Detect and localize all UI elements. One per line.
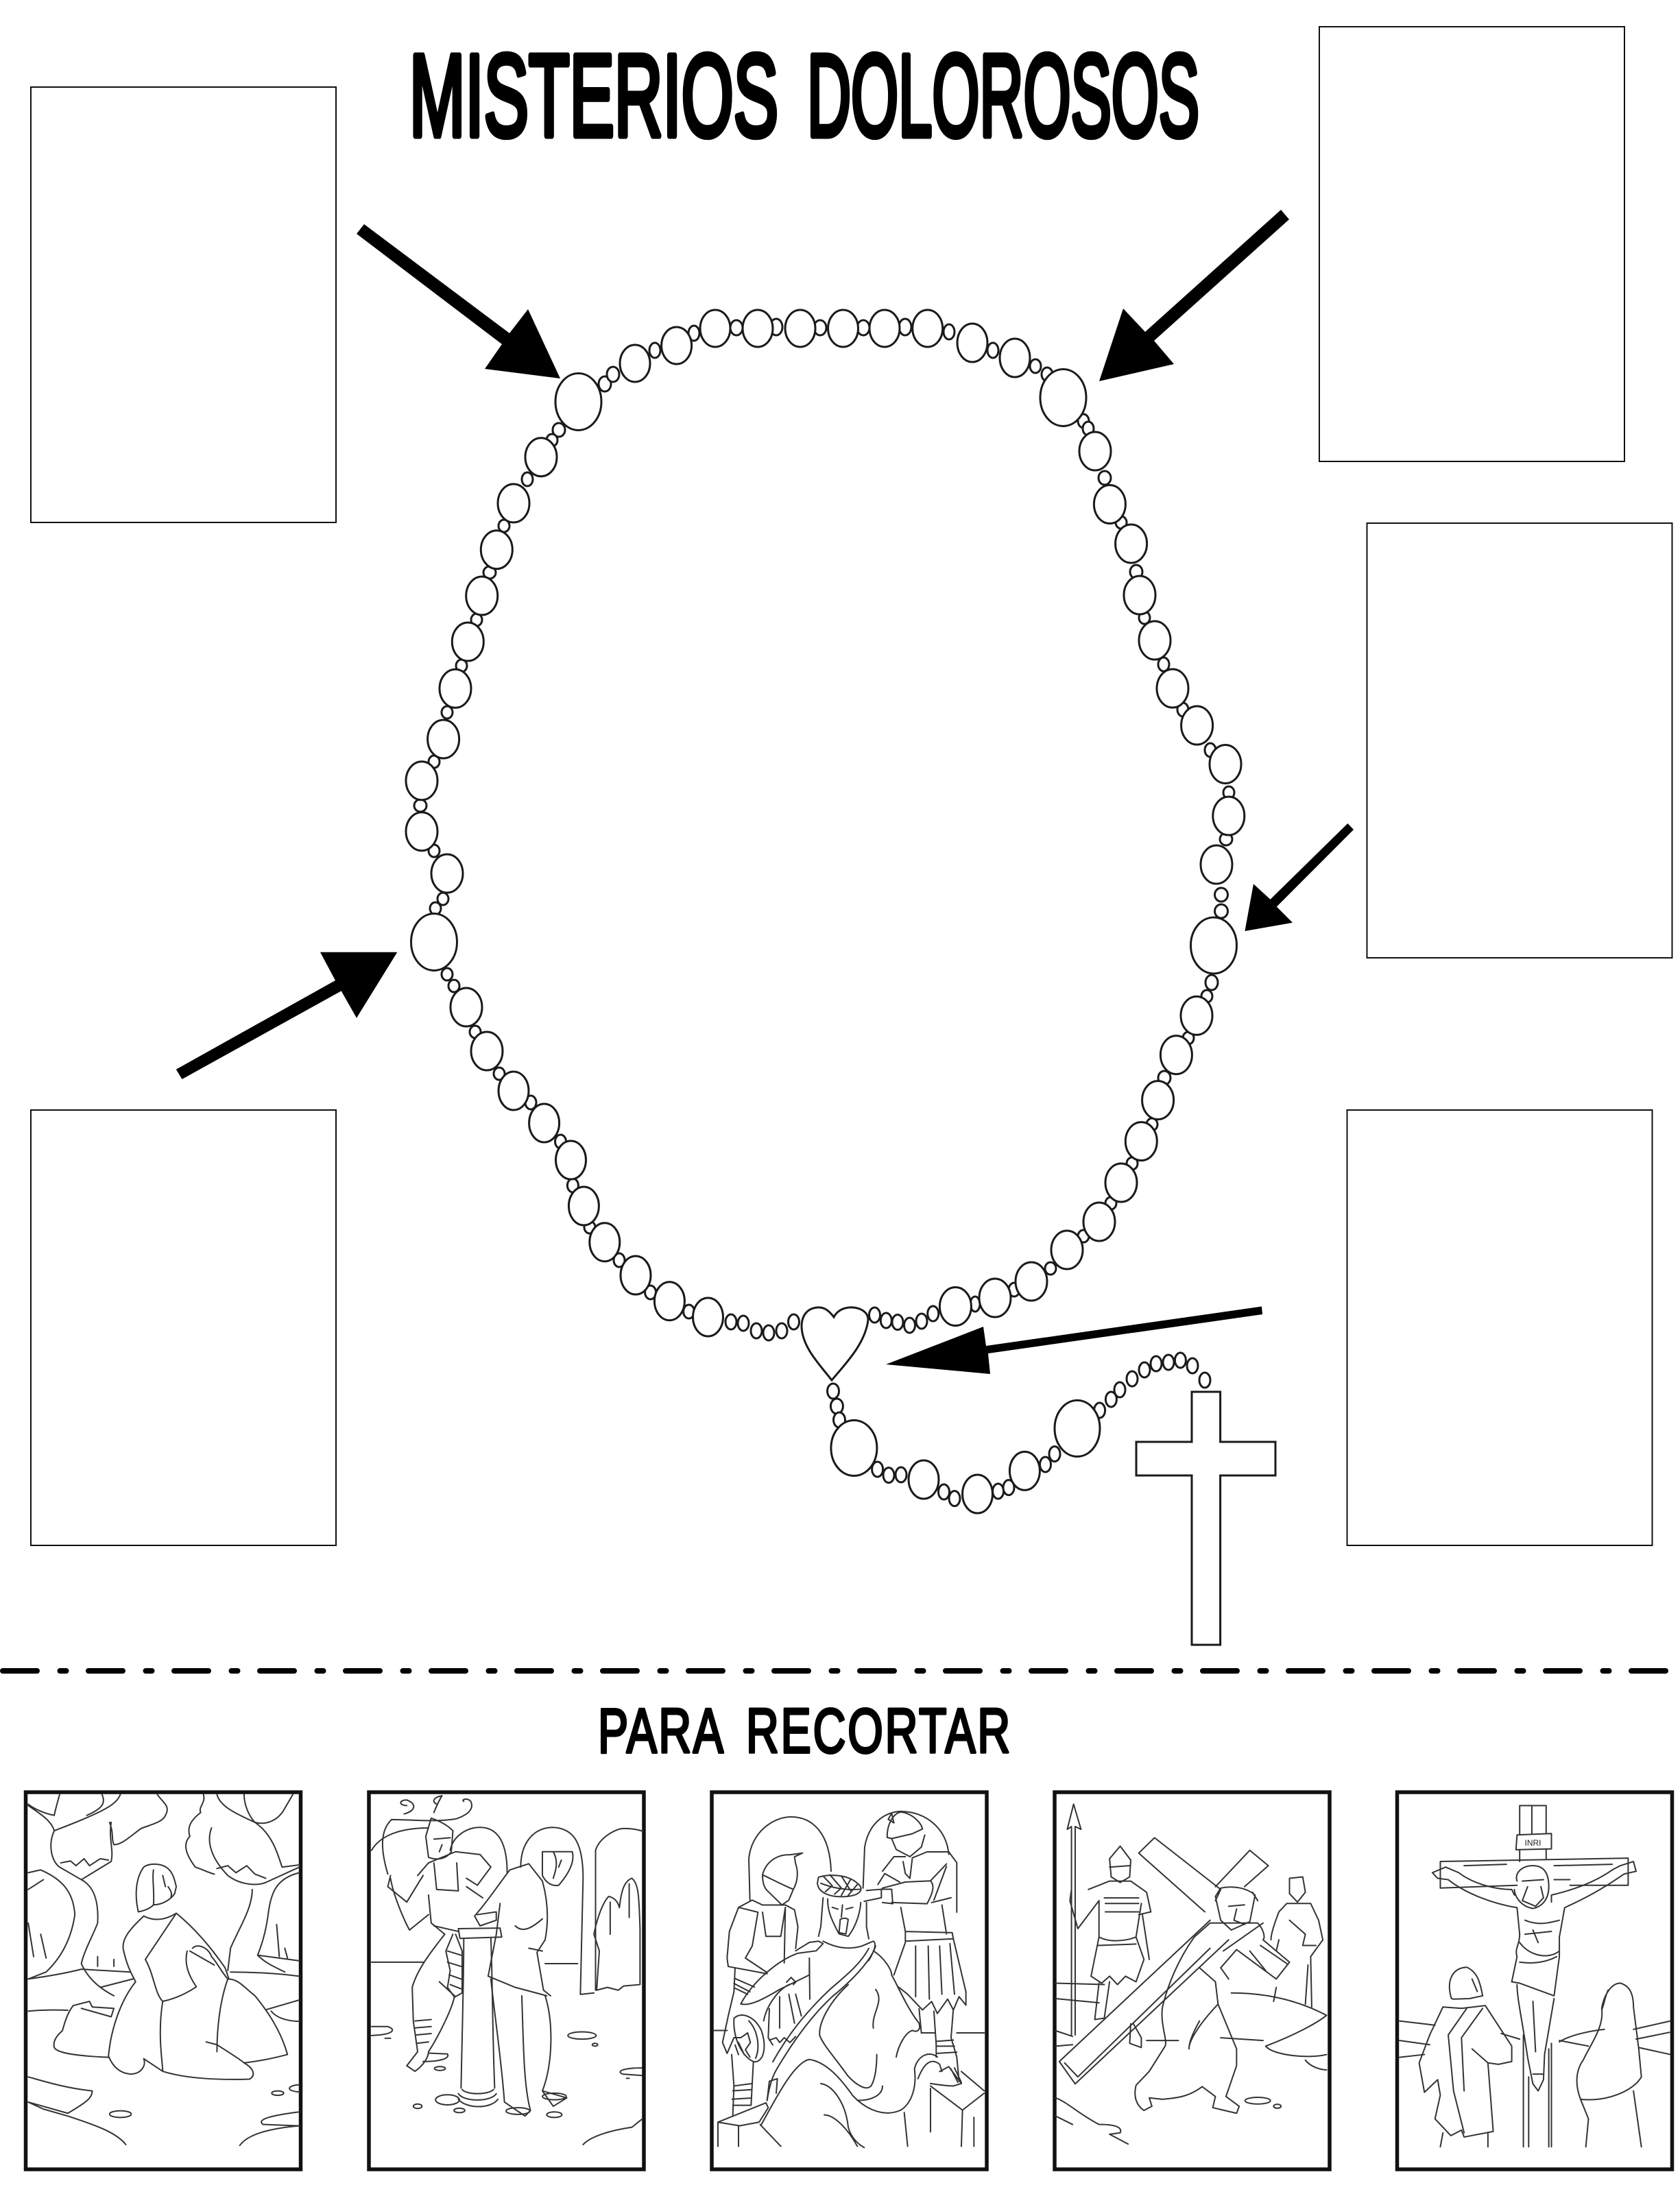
small connecting beads	[414, 319, 1234, 1506]
card: crucifixion	[1397, 1792, 1672, 2169]
sign text: INRI	[1525, 1838, 1541, 1848]
arrow: top left to large bead	[357, 224, 560, 378]
heading: para recortar: RECORTAR	[746, 1695, 1010, 1766]
heart centerpiece	[802, 1307, 868, 1380]
cut line	[3, 1668, 1670, 1674]
rosary	[406, 310, 1245, 1513]
heading: para recortar	[598, 1695, 1010, 1766]
arrow: middle right to large bead	[1245, 823, 1354, 931]
blank box: bottom right	[1347, 1110, 1653, 1545]
blank box: bottom left	[31, 1110, 336, 1545]
normal beads	[406, 310, 1245, 1513]
heading: para recortar: PARA	[598, 1695, 723, 1766]
card: carrying the cross	[1055, 1792, 1330, 2169]
large beads	[411, 369, 1237, 1475]
arrow: bottom right to heart	[886, 1307, 1262, 1374]
card: agony in the garden	[26, 1792, 300, 2169]
card: scourging at the pillar	[369, 1792, 644, 2169]
title: MISTERIOS	[409, 31, 778, 161]
blank box: top left	[31, 87, 336, 522]
crucifix	[1136, 1392, 1275, 1645]
card: crowning with thorns	[712, 1792, 987, 2169]
blank box: top right	[1319, 27, 1624, 461]
title: DOLOROSOS	[807, 31, 1199, 161]
arrow: top right to large bead	[1099, 210, 1289, 381]
arrow: left to large bead	[176, 952, 397, 1079]
blank box: middle right	[1367, 523, 1672, 958]
